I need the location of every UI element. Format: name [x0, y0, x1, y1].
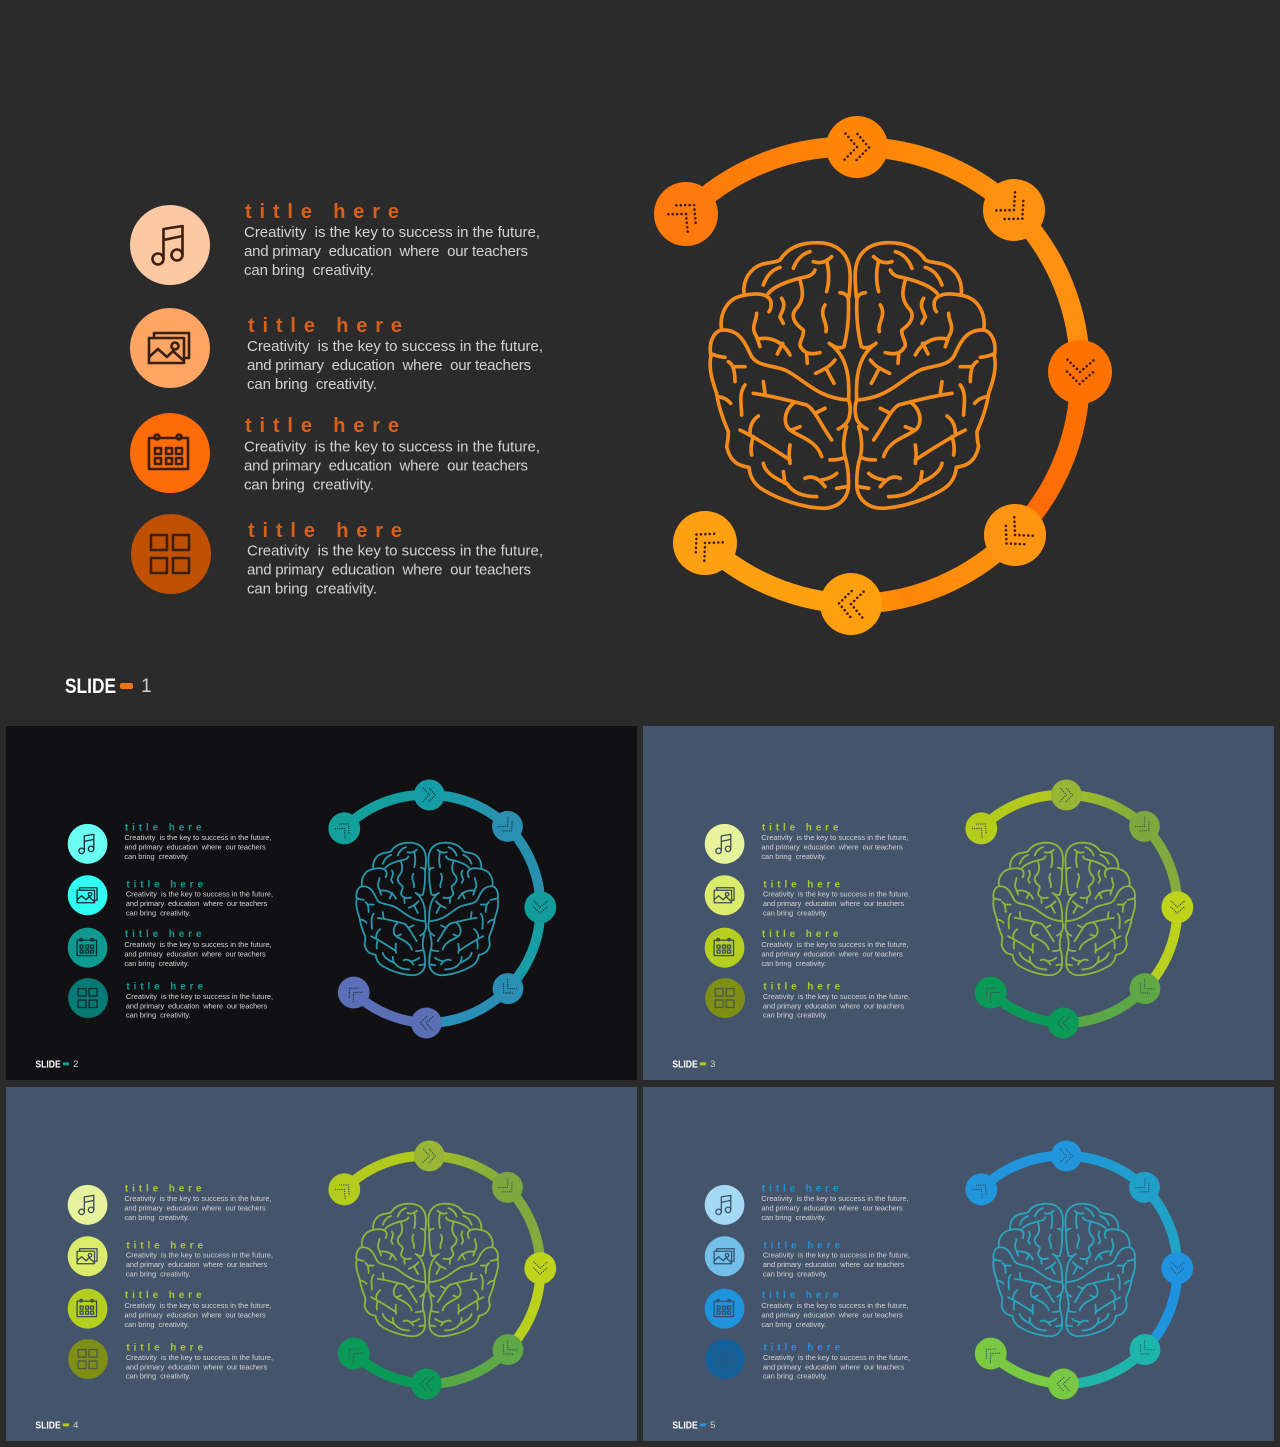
text block 2 — [126, 879, 273, 918]
text block 4: can bring creativity. — [126, 1372, 191, 1381]
text block 4 — [126, 982, 273, 1020]
text block 4: title here — [248, 520, 402, 542]
text block 3: Creativity is the key to success in the future, — [124, 940, 272, 949]
item 4 — [68, 1339, 273, 1381]
text block 3 — [124, 929, 272, 968]
ring with arrows — [654, 116, 1112, 635]
panel: slide 4 — [6, 1087, 637, 1441]
text block 4: Creativity is the key to success in the future, — [126, 1353, 273, 1362]
text block 1: Creativity is the key to success in the future, — [124, 1194, 272, 1203]
text block 3: title here — [245, 415, 399, 437]
item 1 — [130, 201, 540, 285]
text block 4: title here — [763, 982, 840, 993]
icon: grid — [131, 514, 211, 594]
text block 2 — [126, 1240, 273, 1279]
item 4 — [68, 978, 273, 1020]
text block 2: title here — [763, 879, 840, 890]
text block 3: Creativity is the key to success in the future, — [761, 940, 909, 949]
slide label: 2 — [73, 1059, 78, 1070]
text block 1: and primary education where our teachers — [244, 243, 528, 260]
text block 2: can bring creativity. — [763, 1270, 828, 1279]
icon: grid — [68, 1339, 108, 1379]
text block 2: Creativity is the key to success in the future, — [763, 890, 910, 899]
text block 1: can bring creativity. — [124, 1213, 189, 1222]
text block 1: can bring creativity. — [244, 262, 374, 279]
text block 2: can bring creativity. — [126, 1270, 191, 1279]
text block 3: title here — [762, 1290, 839, 1301]
text block 3: Creativity is the key to success in the future, — [124, 1301, 272, 1310]
text block 4: and primary education where our teachers — [126, 1362, 267, 1371]
ring with arrows — [328, 1140, 556, 1399]
text block 1: Creativity is the key to success in the future, — [761, 833, 909, 842]
item 2 — [705, 1236, 910, 1279]
text block 2: and primary education where our teachers — [763, 1260, 904, 1269]
brain — [993, 1204, 1135, 1336]
text block 4: can bring creativity. — [763, 1372, 828, 1381]
text block 3: can bring creativity. — [124, 959, 189, 968]
text block 3: can bring creativity. — [761, 959, 826, 968]
text block 2: can bring creativity. — [247, 376, 377, 393]
text block 1: and primary education where our teachers — [761, 842, 903, 851]
icon: calendar — [68, 1289, 107, 1329]
text block 4: Creativity is the key to success in the future, — [763, 992, 910, 1001]
text block 1: title here — [125, 822, 202, 833]
icon: music — [705, 824, 744, 864]
text block 3: title here — [125, 929, 202, 940]
icon: image — [705, 875, 744, 915]
slide label — [672, 1059, 715, 1070]
text block 3: can bring creativity. — [244, 476, 374, 494]
slide label — [35, 1059, 78, 1070]
text block 3: Creativity is the key to success in the future, — [761, 1301, 909, 1310]
item 4 — [131, 514, 543, 598]
text block 4: Creativity is the key to success in the future, — [247, 542, 543, 560]
text block 2: title here — [763, 1240, 840, 1251]
text block 1: Creativity is the key to success in the future, — [244, 224, 540, 241]
text block 4: title here — [126, 1343, 203, 1354]
text block 1: can bring creativity. — [124, 852, 189, 861]
text block 2: can bring creativity. — [763, 909, 828, 918]
icon: grid — [68, 978, 108, 1018]
text block 1 — [124, 1183, 272, 1222]
ring with arrows — [328, 779, 556, 1038]
text block 4 — [247, 520, 543, 598]
item 1 — [68, 1183, 272, 1225]
text block 3: and primary education where our teachers — [124, 1310, 266, 1319]
ring with arrows — [965, 1140, 1193, 1399]
slide label: SLIDE — [672, 1420, 698, 1431]
text block 2: title here — [126, 1240, 203, 1251]
icon: image — [130, 308, 210, 388]
text block 2: Creativity is the key to success in the future, — [126, 890, 273, 899]
text block 4 — [763, 1343, 910, 1381]
panel: slide 2 — [6, 726, 637, 1080]
icon: music — [130, 205, 210, 285]
text block 1 — [124, 822, 272, 861]
slide label — [672, 1420, 715, 1431]
item 3 — [68, 928, 272, 968]
text block 4 — [763, 982, 910, 1020]
icon: calendar — [130, 413, 210, 493]
item 2 — [705, 875, 910, 918]
text block 1: title here — [245, 201, 399, 223]
text block 1: Creativity is the key to success in the future, — [124, 833, 272, 842]
item 3 — [130, 413, 540, 494]
icon: music — [68, 1185, 107, 1225]
text block 2: and primary education where our teachers — [247, 357, 531, 374]
text block 3: can bring creativity. — [124, 1320, 189, 1329]
text block 2: and primary education where our teachers — [763, 899, 904, 908]
text block 2 — [247, 315, 543, 393]
text block 2: Creativity is the key to success in the future, — [763, 1251, 910, 1260]
brain — [993, 843, 1135, 975]
slide label — [35, 1420, 78, 1431]
text block 4: title here — [763, 1343, 840, 1354]
text block 1 — [244, 201, 540, 279]
text block 4 — [126, 1343, 273, 1381]
text block 4: can bring creativity. — [247, 580, 377, 598]
panel: slide 1 — [65, 116, 1112, 698]
icon: image — [705, 1236, 744, 1276]
slide label: 1 — [141, 676, 152, 697]
text block 4: and primary education where our teachers — [126, 1001, 267, 1010]
text block 3: title here — [125, 1290, 202, 1301]
slide label: SLIDE — [35, 1420, 61, 1431]
text block 2: Creativity is the key to success in the future, — [126, 1251, 273, 1260]
item 4 — [705, 1339, 910, 1381]
text block 3: and primary education where our teachers — [761, 1310, 903, 1319]
slide label: 4 — [73, 1420, 78, 1431]
slide label: SLIDE — [65, 675, 116, 698]
slide label: 5 — [710, 1420, 715, 1431]
item 4 — [705, 978, 910, 1020]
item 1 — [705, 822, 909, 864]
text block 4: and primary education where our teachers — [763, 1001, 904, 1010]
brain — [710, 243, 995, 508]
text block 1 — [761, 1183, 909, 1222]
slide label: SLIDE — [35, 1059, 61, 1070]
text block 2: title here — [126, 879, 203, 890]
text block 4: can bring creativity. — [126, 1011, 191, 1020]
text block 1: and primary education where our teachers — [124, 842, 266, 851]
text block 3: and primary education where our teachers — [124, 949, 266, 958]
text block 2: title here — [248, 315, 402, 337]
text block 2 — [763, 879, 910, 918]
text block 3 — [124, 1290, 272, 1329]
text block 3 — [761, 1290, 909, 1329]
text block 4: and primary education where our teachers — [247, 562, 531, 578]
text block 3 — [761, 929, 909, 968]
panel: slide 3 — [643, 726, 1274, 1080]
text block 1: and primary education where our teachers — [124, 1203, 266, 1212]
icon: calendar — [705, 1289, 744, 1329]
icon: image — [68, 1236, 107, 1276]
text block 4: and primary education where our teachers — [763, 1362, 904, 1371]
item 2 — [130, 308, 543, 393]
icon: grid — [705, 1339, 745, 1379]
item 3 — [68, 1289, 272, 1329]
text block 2: can bring creativity. — [126, 909, 191, 918]
text block 1: Creativity is the key to success in the future, — [761, 1194, 909, 1203]
text block 4: Creativity is the key to success in the future, — [126, 992, 273, 1001]
icon: image — [68, 875, 107, 915]
brain — [356, 843, 498, 975]
item 3 — [705, 1289, 909, 1329]
text block 3 — [244, 415, 540, 494]
icon: grid — [705, 978, 745, 1018]
item 1 — [68, 822, 272, 864]
text block 3: title here — [762, 929, 839, 940]
text block 2: Creativity is the key to success in the future, — [247, 338, 543, 355]
text block 4: title here — [126, 982, 203, 993]
panel: slide 5 — [643, 1087, 1274, 1441]
icon: music — [68, 824, 107, 864]
slide label: 3 — [710, 1059, 715, 1070]
text block 3: and primary education where our teachers — [244, 458, 528, 474]
text block 2 — [763, 1240, 910, 1279]
text block 1: title here — [125, 1183, 202, 1194]
text block 1 — [761, 822, 909, 861]
text block 3: can bring creativity. — [761, 1320, 826, 1329]
text block 4: can bring creativity. — [763, 1011, 828, 1020]
item 1 — [705, 1183, 909, 1225]
text block 1: can bring creativity. — [761, 852, 826, 861]
item 3 — [705, 928, 909, 968]
text block 3: Creativity is the key to success in the future, — [244, 438, 540, 456]
icon: calendar — [705, 928, 744, 968]
text block 2: and primary education where our teachers — [126, 1260, 267, 1269]
text block 2: and primary education where our teachers — [126, 899, 267, 908]
icon: calendar — [68, 928, 107, 968]
text block 1: and primary education where our teachers — [761, 1203, 903, 1212]
slide label: SLIDE — [672, 1059, 698, 1070]
text block 1: title here — [762, 1183, 839, 1194]
item 2 — [68, 1236, 273, 1279]
brain — [356, 1204, 498, 1336]
text block 1: title here — [762, 822, 839, 833]
icon: music — [705, 1185, 744, 1225]
item 2 — [68, 875, 273, 918]
text block 4: Creativity is the key to success in the future, — [763, 1353, 910, 1362]
text block 1: can bring creativity. — [761, 1213, 826, 1222]
ring with arrows — [965, 779, 1193, 1038]
text block 3: and primary education where our teachers — [761, 949, 903, 958]
